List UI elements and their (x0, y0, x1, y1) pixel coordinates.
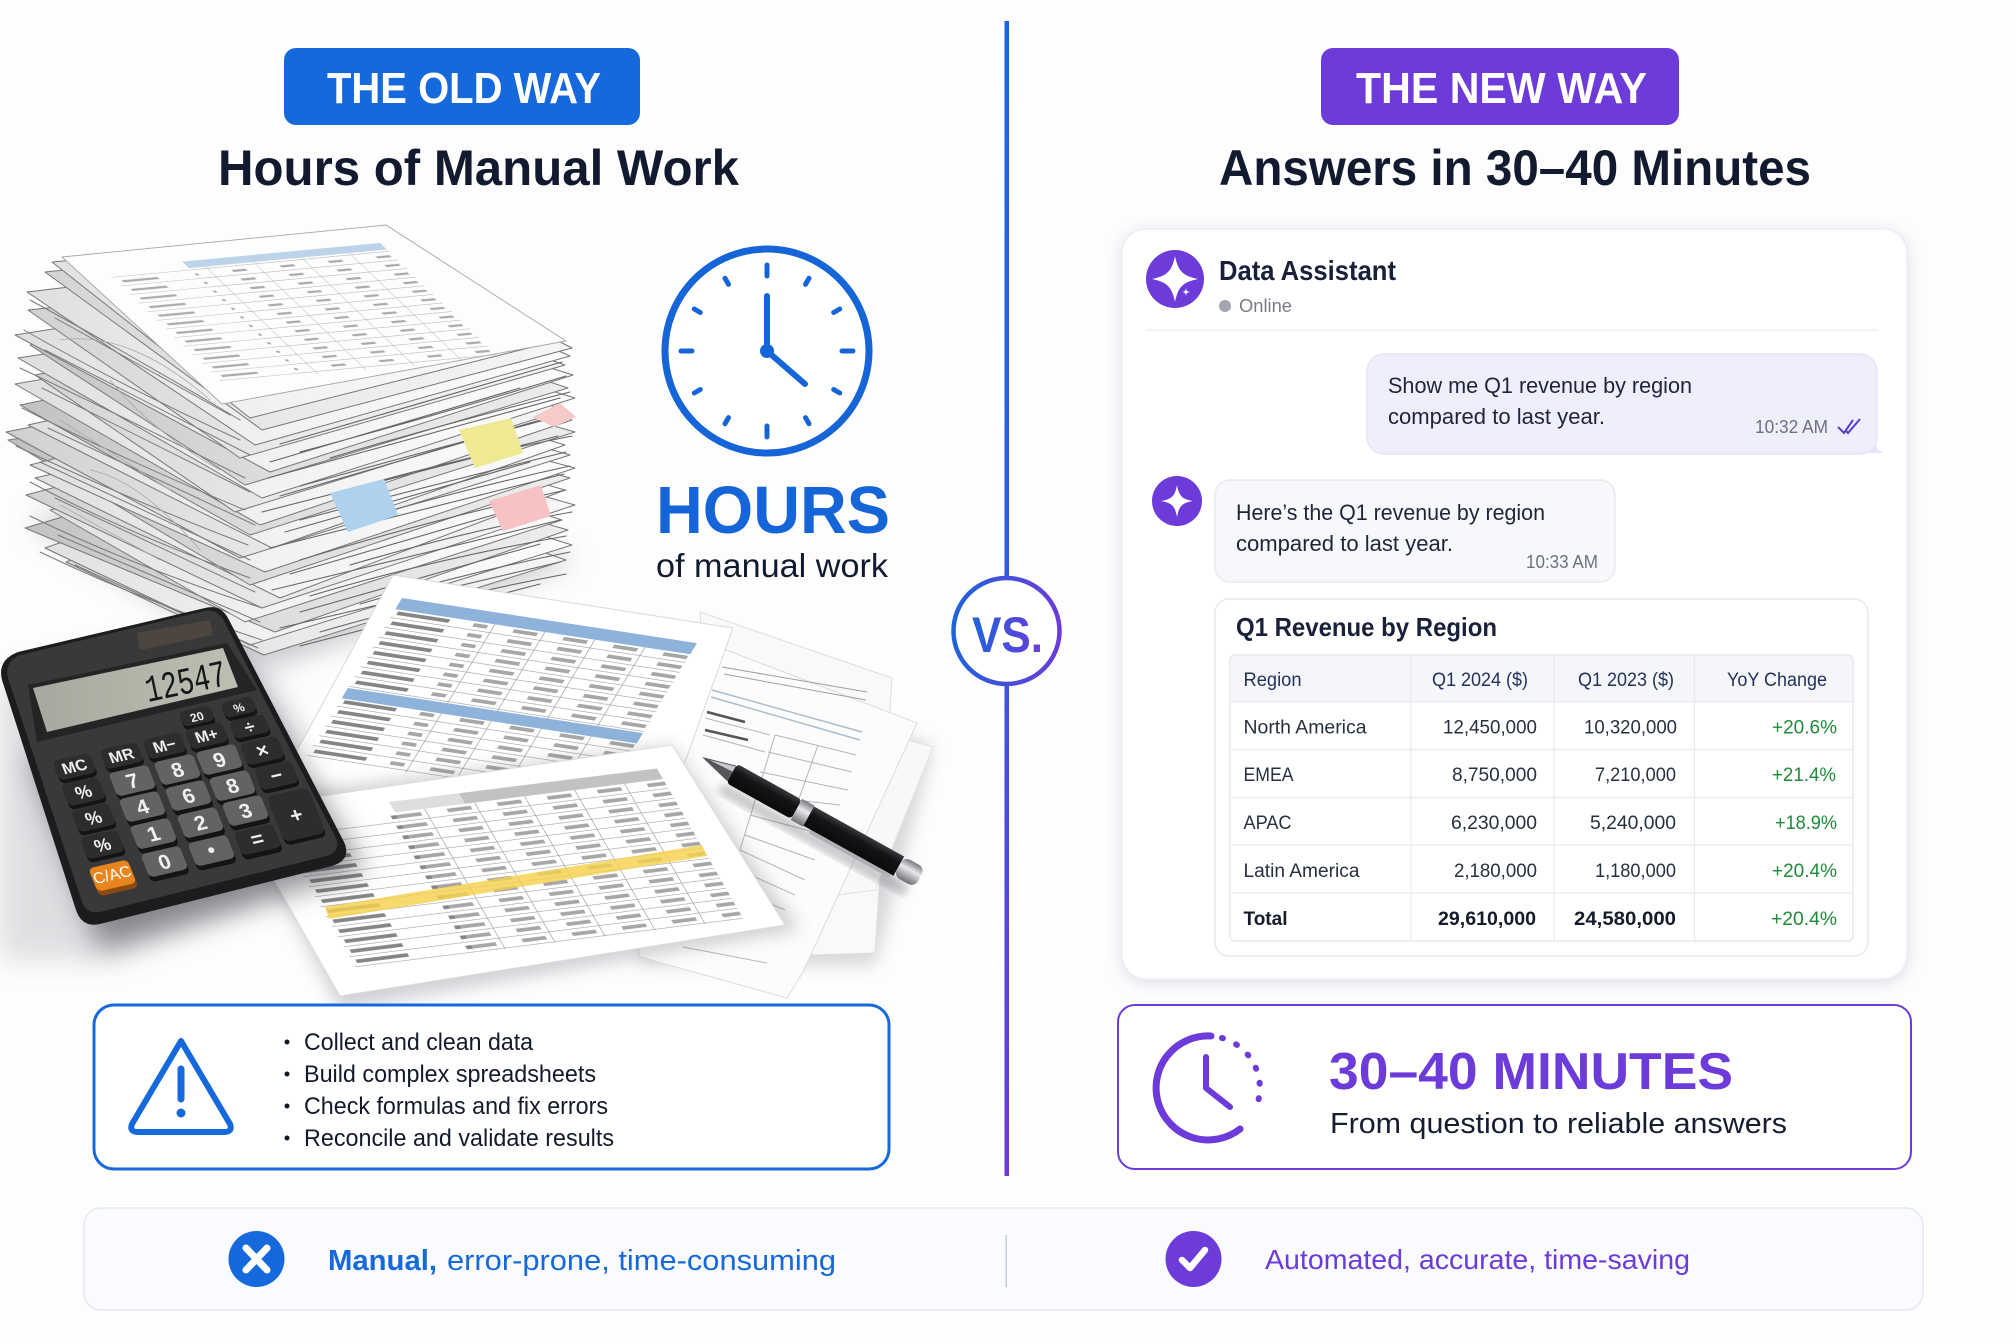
revenue table: +20.4% (1772, 861, 1837, 882)
top sheet with table (62, 225, 566, 404)
revenue table: +21.4% (1772, 765, 1836, 786)
revenue table: 29,610,000 (1438, 909, 1536, 930)
vs badge (954, 578, 1060, 684)
caption: From question to reliable answers (1330, 1108, 1787, 1140)
revenue table: Latin America (1244, 861, 1360, 882)
task list (284, 1029, 614, 1152)
calculator keys: + (286, 804, 307, 828)
revenue table: Q1 2023 ($) (1578, 670, 1674, 691)
calculator keys: 20 (188, 709, 206, 725)
label: 30-40 minutes: 30–40 MINUTES (1329, 1043, 1733, 1101)
paper stack (6, 232, 575, 655)
new way summary: Automated, accurate, time-saving (1265, 1244, 1690, 1275)
calculator keys: 4 (133, 795, 153, 820)
user message bubble: Show me Q1 revenue by region (1388, 373, 1692, 398)
user message bubble (1367, 354, 1884, 454)
revenue table: 1,180,000 (1595, 861, 1676, 882)
calculator keys: 8 (168, 758, 188, 783)
calculator keys: − (267, 765, 286, 788)
task list: Reconcile and validate results (304, 1125, 614, 1152)
assistant reply bubble (1215, 480, 1615, 582)
revenue table: 6,230,000 (1451, 813, 1537, 834)
solar panel (137, 620, 213, 650)
calculator keys: M+ (193, 726, 221, 747)
badge: the old way (284, 48, 640, 125)
online status: Online (1239, 296, 1292, 316)
revenue table: 12,450,000 (1443, 718, 1537, 738)
revenue table: APAC (1244, 813, 1292, 834)
assistant name: Data Assistant (1219, 255, 1396, 286)
revenue table: 8,750,000 (1452, 765, 1537, 786)
panel: chat window (1122, 229, 1907, 982)
icon: assistant avatar (1146, 250, 1204, 308)
revenue table: 24,580,000 (1574, 909, 1676, 930)
revenue table: +20.6% (1772, 718, 1837, 738)
revenue table: Region (1244, 670, 1302, 691)
pen (690, 747, 926, 899)
calculator keys: × (253, 740, 272, 763)
label: of manual work: of manual work (656, 547, 889, 584)
revenue table (1230, 655, 1853, 941)
calculator keys: MR (107, 746, 138, 767)
calculator keys: 3 (236, 800, 256, 824)
calculator keys: = (247, 828, 268, 852)
calculator keys (52, 696, 327, 896)
calculator keys: MC (60, 757, 91, 778)
calculator keys: C/AC (91, 863, 134, 888)
vs badge: VS. (972, 607, 1043, 663)
revenue table: 10,320,000 (1584, 718, 1677, 738)
spreadsheet sheet with blue headers (270, 575, 733, 860)
calculator keys: % (231, 700, 247, 716)
sticky notes (330, 403, 576, 532)
calculator keys: ÷ (241, 717, 258, 737)
panel: bottom comparison bar (84, 1208, 1923, 1310)
calculator keys: 1 (144, 822, 164, 847)
badge: the new way (1321, 48, 1679, 125)
user message bubble: 10:32 AM (1755, 417, 1828, 437)
revenue table: EMEA (1244, 765, 1294, 786)
icon: assistant reply avatar (1152, 476, 1202, 526)
ground shadows (0, 470, 575, 960)
task list: Build complex spreadsheets (304, 1061, 596, 1088)
revenue table: Total (1244, 909, 1288, 930)
revenue table: Q1 2024 ($) (1432, 670, 1528, 691)
panel: 30-40 minutes callout (1118, 1005, 1911, 1169)
calculator keys: 2 (191, 812, 211, 836)
task list: Check formulas and fix errors (304, 1093, 608, 1120)
revenue table: +18.9% (1775, 813, 1837, 834)
old way summary: Manual, (328, 1245, 437, 1277)
assistant reply bubble: compared to last year. (1236, 531, 1453, 556)
icon: x mark (228, 1231, 284, 1287)
calculator keys: 0 (155, 851, 175, 875)
calculator display (28, 643, 257, 742)
paper edge lines (16, 300, 572, 648)
assistant reply bubble: Here’s the Q1 revenue by region (1236, 500, 1545, 525)
table title: Q1 Revenue by Region (1236, 612, 1497, 642)
revenue table: 7,210,000 (1595, 765, 1676, 786)
calculator keys: % (91, 834, 114, 856)
assistant reply bubble: 10:33 AM (1526, 552, 1598, 572)
calculator display: 12547 (142, 655, 231, 714)
revenue table card (1215, 599, 1868, 956)
illustration: paper stack, spreadsheets, calculator and pen (0, 225, 933, 1010)
revenue table: North America (1244, 718, 1367, 738)
user message bubble: compared to last year. (1388, 404, 1605, 429)
icon: check mark (1166, 1231, 1222, 1287)
icon: stopwatch clock (1156, 1036, 1260, 1140)
calculator keys: 7 (123, 770, 143, 794)
heading: answers in 30-40 minutes: Answers in 30–40 Minutes (1219, 140, 1811, 196)
calculator (1, 607, 365, 950)
label: hours: HOURS (656, 473, 890, 548)
task list: Collect and clean data (304, 1029, 534, 1056)
calculator keys: M− (151, 736, 179, 757)
icon: clock (665, 249, 869, 453)
badge: the new way: THE NEW WAY (1356, 64, 1647, 113)
calculator keys: 6 (179, 785, 199, 809)
badge: the old way: THE OLD WAY (327, 64, 601, 113)
revenue table: YoY Change (1727, 670, 1827, 691)
heading: hours of manual work: Hours of Manual Work (218, 140, 739, 196)
calculator keys: % (72, 781, 95, 803)
calculator keys: 8 (223, 774, 243, 799)
calculator keys: 9 (210, 749, 230, 773)
icon: warning triangle (131, 1041, 231, 1132)
back sheet table lines (683, 667, 867, 963)
centre divider line (1004, 21, 1009, 1176)
panel: old way task list (94, 1005, 889, 1169)
old way summary: error-prone, time-consuming (447, 1245, 836, 1277)
back sheets on the right (600, 612, 933, 998)
revenue table: +20.4% (1771, 909, 1837, 930)
spreadsheet sheet with yellow row (230, 745, 800, 1010)
calculator keys: % (82, 807, 105, 829)
revenue table: 2,180,000 (1454, 861, 1537, 882)
revenue table: 5,240,000 (1590, 813, 1676, 834)
